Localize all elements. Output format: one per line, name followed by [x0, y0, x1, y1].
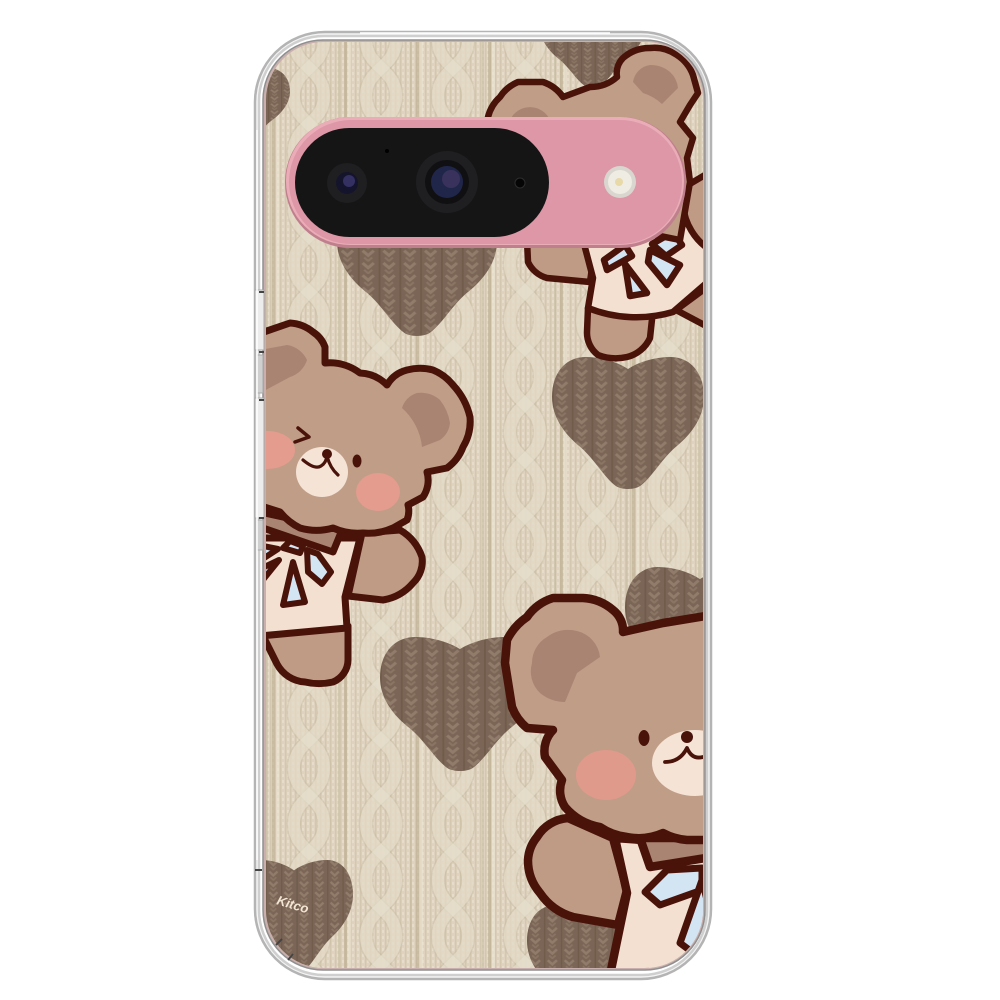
- bear: winking left: [241, 323, 470, 684]
- cheeks: [356, 473, 400, 511]
- mouth: [665, 748, 703, 762]
- main lens: [416, 151, 478, 213]
- clear case frame: [255, 32, 711, 979]
- shirt: [260, 538, 360, 636]
- side button strips: [255, 290, 264, 550]
- case buttons and details: [255, 33, 610, 960]
- winking eye: [295, 428, 309, 442]
- ear inner: [633, 65, 678, 104]
- bear: top right: [480, 48, 710, 358]
- bow: [258, 541, 331, 605]
- pink housing: [285, 117, 686, 248]
- shirt: [607, 840, 703, 968]
- nose: [322, 449, 332, 459]
- brand text: Kitco: [275, 893, 311, 916]
- arm left: [524, 248, 590, 286]
- glare: [257, 33, 610, 860]
- collar: [640, 838, 712, 867]
- cheek: [576, 750, 636, 800]
- pink top edge: [286, 117, 684, 245]
- mouth: [303, 456, 338, 475]
- sensor: [515, 178, 525, 188]
- shirt: [582, 227, 703, 320]
- phone case: [255, 32, 711, 979]
- head: [480, 48, 698, 240]
- eye: [638, 730, 650, 746]
- head: [505, 598, 712, 840]
- muzzle: [296, 447, 348, 497]
- left lens: [327, 163, 367, 203]
- pink face: [289, 120, 682, 244]
- microphone dot: [385, 149, 389, 153]
- head: [258, 323, 470, 533]
- bow: [604, 232, 682, 296]
- black glass: [295, 128, 549, 237]
- collar: [260, 512, 342, 552]
- camera bar: [285, 117, 686, 248]
- ear inner left: [266, 345, 307, 390]
- printed artwork: [266, 42, 703, 968]
- bear: large bottom right: [500, 594, 703, 968]
- right leg: [676, 290, 703, 328]
- eye: [352, 454, 362, 468]
- phone back rim: [263, 40, 705, 970]
- nose: [681, 731, 693, 743]
- bow: [642, 864, 703, 952]
- right arm: [686, 172, 703, 249]
- leg: [587, 308, 653, 358]
- knit hearts: [266, 42, 703, 968]
- clip marks: [255, 292, 293, 960]
- knit background: [260, 40, 710, 970]
- ear inner: [531, 630, 600, 702]
- ear inner right: [402, 393, 450, 447]
- leg: [262, 626, 348, 684]
- flash: [604, 166, 636, 198]
- inner rim: [259, 36, 707, 975]
- arm: [348, 530, 422, 600]
- arm: [528, 818, 627, 925]
- muzzle: [652, 730, 703, 796]
